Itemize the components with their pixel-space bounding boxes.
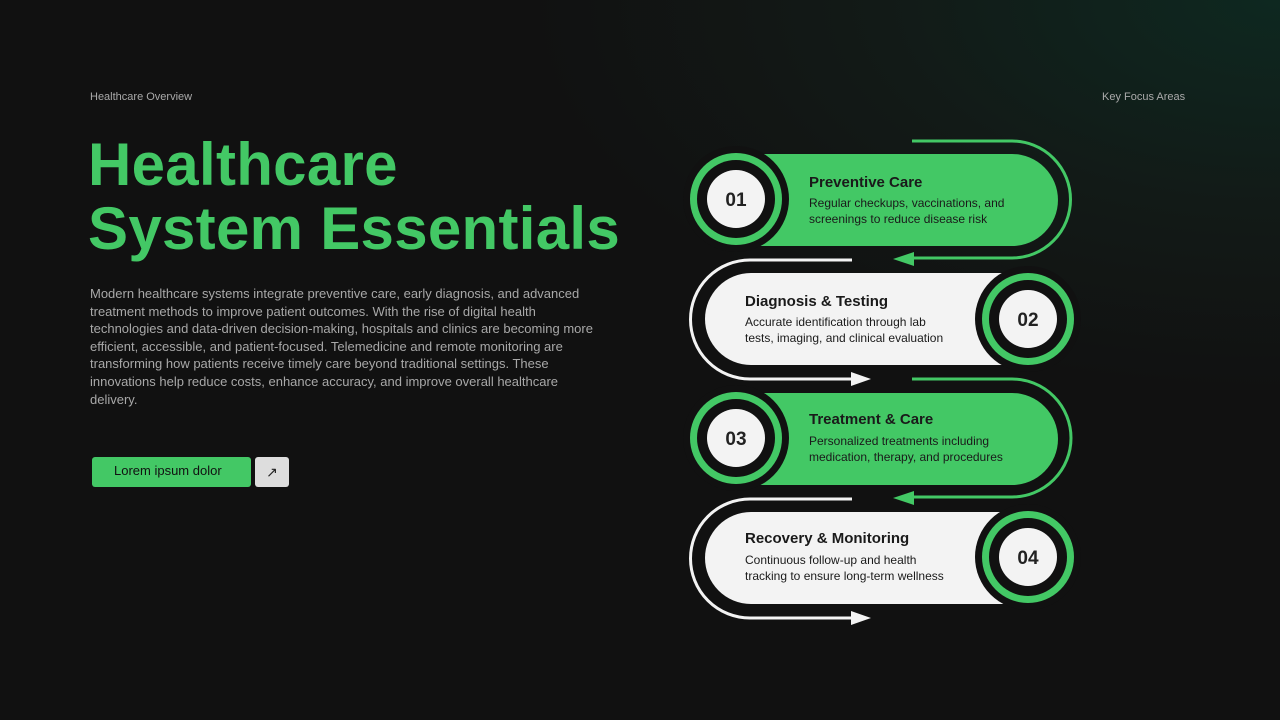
step 01: Regular checkups, vaccinations, and	[809, 196, 1004, 210]
title	[88, 131, 620, 262]
step 02	[690, 260, 1081, 386]
icon: arrow button	[255, 457, 289, 487]
step 02: Diagnosis & Testing	[745, 293, 888, 310]
step 03: Personalized treatments including	[809, 434, 989, 448]
step 03: 03	[725, 429, 747, 450]
step 02: 02	[1017, 310, 1039, 331]
step 01: Preventive Care	[809, 174, 922, 191]
step 03: medication, therapy, and procedures	[809, 450, 1003, 464]
title: System Essentials	[88, 195, 620, 262]
button: Lorem ipsum dolor	[114, 463, 222, 478]
step 02: tests, imaging, and clinical evaluation	[745, 331, 943, 345]
button	[92, 457, 251, 487]
icon: arrow button: ↗	[266, 464, 278, 480]
step 01: 01	[725, 190, 747, 211]
step 04: 04	[1017, 548, 1039, 569]
body text: Modern healthcare systems integrate preventive care, early diagnosis, and advanced treatment methods to improve patient outcomes. With the rise of digital health technologies and data-driven decision-making, hospitals and clinics are becoming more efficient, accessible, and patient-focused. Telemedicine and remote monitoring are transforming how patients receive timely care beyond traditional settings. These innovations help reduce costs, enhance accuracy, and improve overall healthcare delivery.	[90, 286, 593, 407]
step 03: Treatment & Care	[809, 411, 933, 428]
step 04	[690, 499, 1081, 625]
label: healthcare overview: Healthcare Overview	[90, 91, 192, 103]
step 04: Continuous follow-up and health	[745, 553, 916, 567]
label: key focus areas: Key Focus Areas	[1102, 91, 1185, 103]
step 04: Recovery & Monitoring	[745, 530, 909, 547]
step 03	[683, 379, 1071, 505]
step 04: tracking to ensure long-term wellness	[745, 569, 944, 583]
step 02: Accurate identification through lab	[745, 315, 926, 329]
step 01	[683, 141, 1071, 266]
title: Healthcare	[88, 131, 398, 198]
step 01: screenings to reduce disease risk	[809, 212, 988, 226]
